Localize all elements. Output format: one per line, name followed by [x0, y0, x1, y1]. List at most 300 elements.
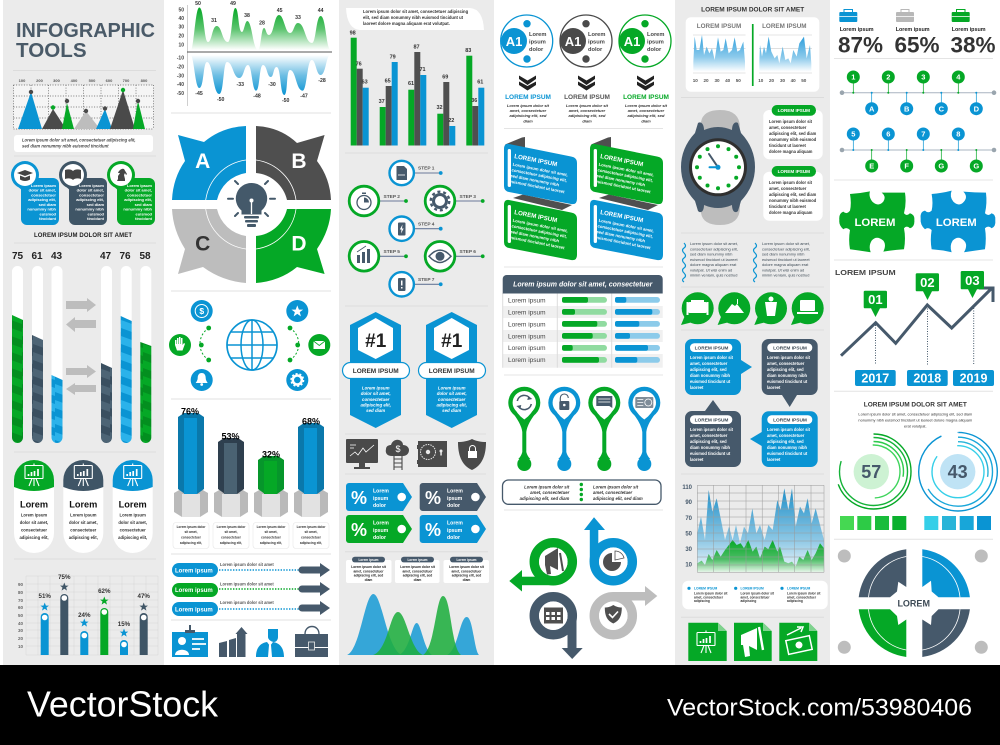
presentation cards: Lorem ipsum	[120, 512, 146, 518]
pill text box	[502, 480, 661, 504]
line chart with years: 2017	[861, 372, 889, 386]
mirrored area chart: -45	[195, 91, 203, 97]
progress table: Lorem ipsum	[508, 333, 546, 340]
mirrored area chart: 49	[230, 1, 236, 7]
A1 badges: diam	[641, 118, 651, 124]
vertical bars: 76	[119, 251, 131, 262]
callout bubbles: laoreet	[767, 457, 781, 462]
watch	[681, 110, 755, 225]
icon: growth chart	[219, 627, 248, 657]
circular arrow: pie chart	[584, 517, 632, 581]
pill arrows: Lorem ipsum dolor sit amet	[220, 582, 274, 586]
column 1	[174, 413, 208, 517]
chart legend: adipiscing	[740, 599, 756, 603]
A1 badges: Lorem	[529, 32, 546, 38]
spike chart panel: 10	[693, 78, 698, 83]
A1 badges: ipsum	[529, 40, 546, 46]
ribbon text 2: Lorem ipsum dolor sit amet,	[598, 162, 654, 177]
callout bubbles: amet, consectetuer	[690, 433, 728, 438]
small text cards: adipiscing elit, sed	[354, 574, 383, 578]
icon: shield lock	[458, 439, 486, 470]
letter timeline: G	[938, 162, 944, 171]
icon: gear	[286, 369, 308, 391]
title: TOOLS	[16, 39, 87, 62]
small text cards: adipiscing elit, sed	[403, 574, 432, 578]
A1 badges: LOREM IPSUM	[505, 94, 551, 101]
grouped bar chart: 61	[477, 80, 483, 86]
number timeline: B	[904, 104, 910, 113]
text bubble	[346, 8, 484, 30]
icon: green document with cash	[779, 623, 817, 661]
area chart with grid: 30	[685, 547, 693, 553]
small text cards: diam	[365, 578, 372, 582]
briefcase stats: Lorem ipsum	[840, 27, 874, 33]
A1 badges: adipisicing elit, sed	[510, 113, 547, 118]
tag 02: 02	[920, 275, 935, 290]
pin cards: dolor sit amet,	[125, 188, 152, 192]
seven steps: STEP 6	[460, 249, 476, 255]
star bar chart: 70	[18, 598, 23, 603]
percent tags	[346, 483, 486, 543]
callout bubbles: euismod tincidunt ut	[767, 379, 808, 384]
pill arrows: Lorem ipsum dolor sit amet	[220, 600, 274, 605]
mirrored area chart: -10	[177, 56, 184, 62]
percent tags: dolor	[373, 503, 386, 509]
callout bubbles: amet, consectetuer	[767, 361, 805, 366]
number timeline: 2	[886, 73, 890, 82]
spike chart panel: 20	[769, 78, 774, 83]
callout bubbles: diam nonummy nibh	[767, 373, 808, 378]
progress table: Lorem ipsum	[508, 357, 546, 364]
pill arrows: Lorem ipsum dolor sit amet	[220, 562, 274, 567]
spike chart panel	[686, 6, 819, 92]
percent tags: Lorem	[447, 488, 463, 494]
spike chart panel: 30	[714, 78, 720, 83]
spike chart panel: LOREM IPSUM	[762, 23, 807, 30]
pill arrows: Lorem ipsum	[175, 588, 213, 594]
wavy text columns: minim veniam, quis nostrud	[762, 272, 809, 278]
ribbon text 3: Lorem ipsum dolor sit amet,	[512, 218, 568, 233]
A1 badges: ipsum	[647, 40, 664, 46]
presentation cards: dolor sit amet,	[69, 520, 98, 525]
badge right: LOREM IPSUM	[429, 368, 475, 375]
wavy text columns: Lorem ipsum dolor sit amet,	[690, 241, 738, 246]
percent tags: ipsum	[373, 496, 389, 502]
pill text box: adipiscing elit, sed diam	[520, 496, 569, 501]
star bar chart: 90	[18, 582, 23, 587]
seven steps	[349, 161, 485, 296]
pin cards: Lorem ipsum	[79, 183, 104, 188]
quadrant circle	[838, 549, 988, 657]
presentation cards: consectetuer	[70, 528, 97, 532]
area chart with grid: 110	[682, 485, 693, 491]
grouped bar chart: 76	[356, 62, 362, 68]
ribbon text 3: sed diam nonummy nibh	[510, 229, 560, 243]
callout bubbles: amet, consectetuer	[690, 361, 728, 366]
watch text boxes: amet, consectetuer	[769, 186, 807, 191]
percent tags: dolor	[373, 535, 386, 541]
mountain chart caption: sed diam nonummy nibh euismod tincidunt	[22, 144, 109, 148]
grouped bar chart: 36	[471, 98, 477, 104]
icon: cloud ladder: $	[395, 444, 401, 454]
badge left: adipiscing elit,	[360, 402, 391, 407]
A1 badges: A1	[624, 34, 640, 49]
presentation cards: Lorem	[20, 500, 48, 510]
3D hex columns: Lorem ipsum dolor	[177, 525, 206, 529]
letter timeline	[840, 128, 996, 172]
watch text boxes: tincidunt ut laoreet	[769, 204, 806, 209]
tag 02	[916, 273, 939, 300]
callout bubbles: amet, consectetuer	[767, 433, 805, 438]
icon: id card	[172, 625, 208, 657]
A1 badges: amet, consectetuer	[510, 108, 547, 113]
watch text boxes	[763, 105, 823, 221]
ribbon text 4	[595, 209, 657, 250]
star bar chart: 40	[18, 621, 23, 626]
star bar chart: 75%	[58, 574, 71, 581]
mountain chart	[14, 78, 154, 129]
3D hex columns: sit amet,	[265, 530, 278, 534]
3D hex columns: Lorem ipsum dolor	[297, 525, 326, 529]
presentation cards: consectetuer	[120, 528, 146, 532]
icon: briefcase	[295, 626, 328, 657]
presentation cards: adipiscing elit,	[118, 535, 147, 540]
grouped bar chart: 87	[413, 44, 420, 50]
wavy text columns	[682, 241, 810, 282]
star bar chart: 20	[18, 636, 23, 641]
icon: hand	[169, 334, 191, 356]
pin cards: sed diam	[135, 202, 152, 207]
watch text boxes: nonummy nibh euismod	[769, 198, 817, 203]
watch text boxes: adipiscing elit, sed diam	[769, 131, 817, 136]
3D hex columns: consectetuer	[181, 536, 202, 540]
area chart with grid: 50	[685, 532, 693, 538]
icon: dollar: $	[199, 306, 204, 316]
pin cards: consectetuer	[79, 192, 104, 198]
callout bubbles	[685, 339, 818, 467]
wavy text columns: euismod tincidunt ut laoreet	[690, 257, 738, 262]
watch text boxes: Lorem ipsum dolor sit	[769, 119, 813, 124]
3D hex columns: consectetuer	[301, 536, 322, 540]
star bar chart: 60	[18, 605, 23, 610]
pin 1	[508, 387, 540, 471]
ABCD quadrant diagram: C	[195, 233, 210, 256]
text bubble: elit, sed diam nonummy nibh euismod tincidunt ut	[363, 15, 464, 20]
chart legend: adipiscing	[694, 599, 710, 603]
pin cards: tincidunt	[135, 216, 153, 221]
A1 badges: dolor	[647, 47, 662, 53]
spike chart panel: LOREM IPSUM	[697, 23, 741, 30]
mirrored area chart: 40	[178, 16, 184, 22]
vertical bars	[12, 251, 151, 443]
mirrored area chart: 38	[244, 13, 250, 19]
watch text boxes: dolore magna aliquam	[769, 149, 813, 154]
A1 badges: LOREM IPSUM	[564, 94, 610, 101]
A1 badges: ipsum	[588, 40, 605, 46]
bell curves	[347, 594, 479, 655]
ribbon text 1: LOREM IPSUM	[514, 153, 558, 168]
wavy text columns: dolore magna aliquam erat	[690, 262, 737, 267]
badge left: #1	[365, 331, 387, 352]
ABCD quadrant diagram	[172, 126, 331, 283]
chart legend: LOREM IPSUM	[740, 587, 764, 591]
spike chart panel: 30	[780, 78, 785, 83]
3D hex columns: 32%	[262, 450, 280, 460]
callout bubbles: adipiscing elit, sed	[690, 367, 727, 372]
grouped bar chart: 79	[390, 54, 396, 60]
vertical bars: 75	[12, 251, 23, 262]
callout bubbles: laoreet	[767, 385, 781, 390]
mirrored area chart: -48	[253, 94, 261, 100]
grouped bar chart: 83	[465, 48, 471, 54]
green puzzle piece	[839, 191, 914, 252]
presentation cards: adipiscing elit,	[69, 535, 98, 540]
A1 badges: Lorem	[647, 32, 664, 38]
badge right: dolor sit amet,	[437, 391, 467, 396]
A1 badges: diam	[582, 118, 592, 124]
percent tags: dolor	[447, 535, 460, 541]
percent tags: Lorem	[447, 520, 463, 526]
badge left: sed diam	[366, 408, 385, 413]
mountain chart: 600	[106, 78, 113, 83]
gauge 57	[836, 434, 911, 509]
mirrored area chart: 10	[178, 42, 184, 48]
pill text box: amet, consectetuer	[530, 490, 570, 495]
3D hex columns: consectetuer	[261, 536, 282, 540]
pin cards: sed diam	[39, 202, 56, 207]
star bar chart: 51%	[39, 593, 51, 600]
hexagon badges	[342, 312, 486, 428]
letter timeline: 6	[886, 130, 890, 139]
watch text boxes: tincidunt ut laoreet	[769, 143, 806, 148]
ribbon text 2: LOREM IPSUM	[600, 153, 644, 168]
star bar chart	[18, 574, 158, 655]
pin cards	[11, 161, 155, 225]
chart legend	[682, 581, 828, 609]
3D hex columns: Lorem ipsum dolor	[217, 525, 246, 529]
pin cards: consectetuer	[31, 192, 56, 198]
wavy text columns: volutpat. Ut wisi enim ad	[762, 267, 804, 272]
callout bubbles: laoreet	[690, 457, 704, 462]
area chart with grid: 10	[685, 562, 693, 568]
percent tags: dolor	[447, 503, 460, 509]
seven steps: STEP 1	[418, 166, 435, 172]
title: INFOGRAPHIC	[16, 19, 155, 42]
green speech icons	[681, 292, 824, 325]
A1 badges: Lorem ipsum dolor sit	[625, 103, 668, 108]
spike chart panel: 40	[791, 78, 796, 83]
mountain chart: 300	[53, 78, 61, 83]
callout bubbles: diam nonummy nibh	[767, 445, 808, 450]
3D hex columns: adipiscing elit,	[260, 541, 282, 545]
vertical bars: 61	[31, 251, 43, 262]
star bar chart: 15%	[118, 621, 131, 628]
blue puzzle piece	[921, 191, 995, 252]
footer bar: VectorStock.com/53980406	[667, 695, 972, 722]
ring gauges heading: nonummy nibh euismod tincidunt ut laoreet dolore magna aliquam	[858, 418, 972, 422]
ribbon text 3: LOREM IPSUM	[514, 209, 558, 224]
chart legend: Lorem ipsum dolor sit	[694, 592, 728, 596]
letter timeline: E	[869, 162, 874, 171]
briefcase stats: 65%	[894, 32, 940, 57]
mountain chart: 500	[89, 78, 96, 83]
ring gauges heading: LOREM IPSUM DOLOR SIT AMET	[864, 402, 967, 409]
chart legend: LOREM IPSUM	[694, 587, 718, 591]
pin cards: tincidunt	[87, 216, 105, 221]
ribbon text 4: LOREM IPSUM	[600, 209, 644, 224]
grouped bar chart: 63	[362, 80, 368, 86]
3D hex columns: 68%	[302, 416, 320, 426]
A1 badges: A1	[565, 34, 581, 49]
mirrored area chart: 33	[295, 15, 301, 21]
A1 badges: dolor	[588, 47, 603, 53]
A1 badges: adipisicing elit, sed	[628, 113, 665, 118]
grouped bar chart	[350, 30, 484, 146]
grouped bar chart: 37	[379, 99, 385, 105]
briefcase stats: 38%	[950, 32, 996, 57]
callout bubbles: LOREM IPSUM	[695, 346, 728, 352]
wavy text columns: Lorem ipsum dolor sit amet,	[762, 241, 810, 246]
number timeline: C	[939, 104, 945, 113]
letter timeline: G	[973, 162, 979, 171]
A1 badges: Lorem ipsum dolor sit	[507, 103, 550, 108]
grouped bar chart: 69	[442, 74, 448, 80]
mountain chart: 700	[123, 78, 130, 83]
ribbon text 2: sed diam nonummy nibh	[596, 173, 646, 187]
pill text box: amet, consectetuer	[593, 490, 632, 495]
line chart with years	[835, 268, 994, 386]
step icons	[357, 166, 451, 291]
mirrored area chart: 50	[195, 1, 201, 7]
3D hex columns: sit amet,	[225, 530, 238, 534]
A1 badges	[501, 15, 671, 124]
letter timeline: 8	[956, 130, 960, 139]
badge left	[342, 312, 410, 428]
gauge 43	[919, 432, 997, 511]
small text cards: diam	[463, 578, 470, 582]
globe with icons	[169, 300, 330, 391]
callout bubbles: LOREM IPSUM	[773, 346, 807, 352]
progress table: Lorem ipsum	[508, 345, 546, 352]
wavy text columns: consectetuer adipiscing elit,	[762, 246, 810, 251]
percent tags: %	[351, 488, 367, 508]
ribbon text 3	[509, 209, 571, 250]
pin cards: tincidunt	[39, 216, 57, 221]
callout bubbles: euismod tincidunt ut	[767, 451, 808, 456]
watch text boxes: amet, consectetuer	[769, 125, 807, 130]
letter timeline: 5	[851, 130, 855, 139]
progress table: Lorem ipsum	[508, 298, 546, 304]
3D hex columns: 53%	[221, 432, 240, 442]
pill text box: Lorem ipsum dolor sit	[524, 484, 570, 490]
pin 2	[548, 387, 580, 471]
icon: light bulb	[228, 181, 275, 227]
callout bubbles: LOREM IPSUM	[695, 418, 728, 424]
mirrored area chart: -50	[282, 98, 290, 104]
presentation cards: dolor sit amet,	[20, 520, 48, 525]
chart legend: amet, consectetuer	[787, 595, 817, 599]
A1 badges: amet, consectetuer	[569, 108, 606, 113]
A1 badges: amet, consectetuer	[628, 108, 665, 113]
mirrored area chart: 28	[259, 20, 265, 26]
percent tags: %	[425, 520, 441, 540]
spike chart panel: 10	[758, 78, 764, 83]
vertical bars: 58	[139, 251, 151, 262]
wavy text columns: volutpat. Ut wisi enim ad	[690, 267, 732, 272]
grouped bar chart: 65	[385, 78, 391, 84]
star bar chart: 47%	[138, 593, 150, 600]
presentation cards: Lorem	[69, 500, 97, 510]
small text cards: Lorem ipsum dolor sit	[449, 565, 485, 569]
seven steps: STEP 3	[460, 194, 476, 200]
3D hex columns: 76%	[181, 406, 199, 416]
3D hex columns: sit amet,	[185, 530, 198, 534]
percent tags: Lorem	[373, 488, 389, 494]
letter timeline: F	[904, 162, 909, 171]
pin cards: euismod	[40, 212, 57, 216]
icon: green document with megaphone	[734, 623, 772, 661]
3D hex columns: adipiscing elit,	[180, 541, 202, 545]
small text cards	[346, 557, 489, 583]
text bubble: laoreet dolore magna aliquam erat volutpat.	[363, 21, 450, 26]
badge right	[418, 312, 486, 428]
callout bubbles: adipiscing elit, sed	[767, 367, 804, 372]
star bar chart: 30	[18, 628, 23, 633]
badge left: Lorem ipsum	[362, 386, 390, 390]
briefcase stats	[838, 10, 996, 57]
mirrored area chart: 30	[178, 24, 184, 30]
number timeline: D	[974, 104, 980, 113]
badge right: consectetuer	[438, 397, 466, 402]
presentation cards: consectetuer	[21, 528, 47, 532]
grouped bar chart: 32	[436, 105, 443, 111]
vertical bars: 47	[100, 251, 111, 262]
small text cards: Lorem ipsum dolor sit	[351, 565, 387, 569]
callout bubbles: LOREM IPSUM	[773, 418, 807, 424]
chart legend: Lorem ipsum dolor sit	[740, 592, 775, 596]
small text cards: Lorem ipsum	[358, 558, 379, 562]
progress table: Lorem ipsum	[508, 322, 546, 328]
number timeline: 4	[956, 73, 961, 82]
seven steps: STEP 2	[384, 194, 400, 200]
pin cards: nonummy nibh	[27, 206, 57, 212]
spike chart panel: 40	[725, 78, 731, 83]
line chart with years: 2019	[960, 372, 987, 386]
mountain chart caption	[14, 135, 153, 152]
wavy text columns: euismod tincidunt ut laoreet	[762, 257, 810, 262]
badge left: consectetuer	[362, 397, 390, 402]
pin cards: euismod	[88, 212, 105, 216]
text bubble: Lorem ipsum dolor sit amet, consectetuer adipiscing	[363, 9, 469, 14]
grouped bar chart: 98	[350, 30, 356, 36]
chart legend: LOREM IPSUM	[787, 587, 811, 591]
ABCD quadrant diagram: B	[291, 150, 307, 173]
callout bubbles: diam nonummy nibh	[690, 373, 731, 378]
mirrored area chart: 45	[277, 8, 283, 14]
mirrored area chart: -50	[177, 91, 184, 97]
icon: star	[286, 300, 308, 322]
presentation cards: adipiscing elit,	[19, 535, 49, 540]
small text cards: amet, consectetuer	[451, 569, 482, 573]
callout bubbles: Lorem ipsum dolor sit	[767, 355, 811, 360]
pill text box: adipiscing elit, sed diam	[593, 496, 643, 501]
percent tags: %	[425, 488, 441, 508]
star bar chart: 62%	[98, 588, 111, 595]
3D hex columns: adipiscing elit,	[220, 541, 242, 545]
spike chart panel: 20	[703, 78, 709, 83]
A1 badges: LOREM IPSUM	[623, 94, 669, 101]
briefcase stats: Lorem ipsum	[952, 27, 986, 33]
